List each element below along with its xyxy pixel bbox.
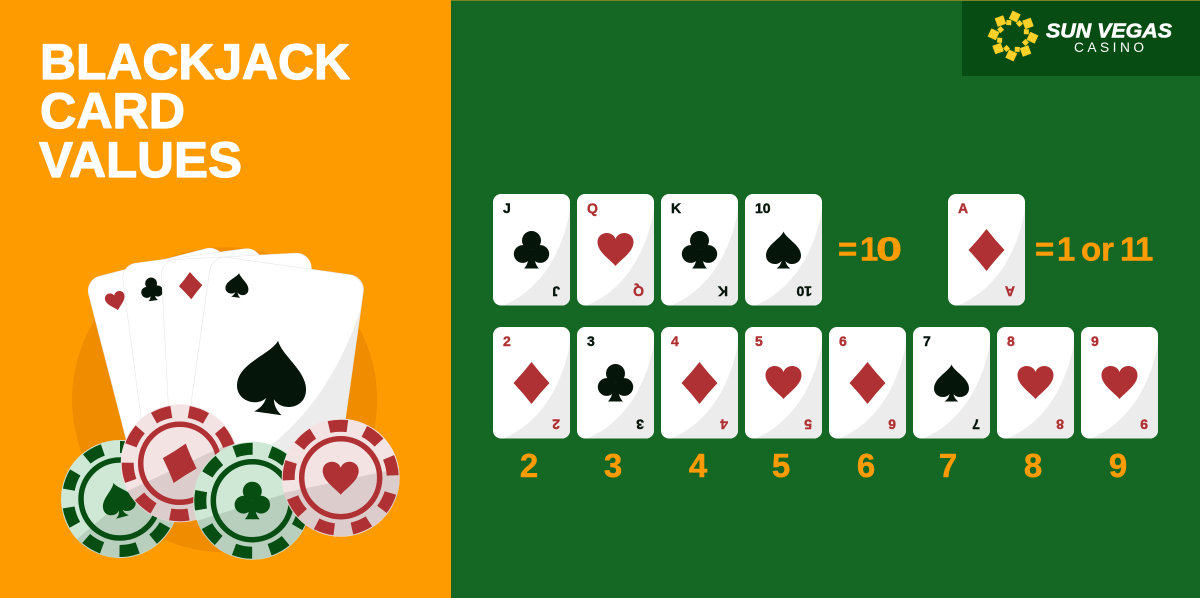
card: five of hearts: 5 <box>755 333 763 349</box>
card: eight of hearts: 8 <box>1056 416 1064 432</box>
card: ten of spades: 10 <box>796 284 812 300</box>
value label: one or eleven: = <box>1035 230 1054 268</box>
card: five of hearts <box>745 327 822 438</box>
chip: red heart <box>278 415 410 547</box>
card: three of clubs: 3 <box>636 416 644 432</box>
row: number cards <box>493 327 1158 438</box>
fanned card: ace of spades <box>181 255 365 499</box>
row: number values: 6 <box>857 447 875 484</box>
value label: equals ten <box>838 230 902 268</box>
card: seven of spades: 7 <box>923 333 931 349</box>
row: number values: 9 <box>1109 447 1127 484</box>
illustration: fanned cards and chips <box>61 245 410 582</box>
card: three of clubs <box>577 327 654 438</box>
card: ace of diamonds: A <box>958 200 968 216</box>
card: seven of spades: 7 <box>972 416 980 432</box>
card: king of clubs: K <box>718 284 728 300</box>
chip: green club <box>186 434 326 574</box>
row: number values <box>520 447 1127 484</box>
card: two of diamonds: 2 <box>552 416 560 432</box>
card: six of diamonds: 6 <box>888 416 896 432</box>
logo background <box>962 1 1200 76</box>
card: eight of hearts <box>997 327 1074 438</box>
logo wordmark <box>1046 20 1173 55</box>
card: two of diamonds <box>493 327 570 438</box>
row: number values: 2 <box>520 447 538 484</box>
card: nine of hearts: 9 <box>1091 333 1099 349</box>
chip: red diamond <box>119 403 258 541</box>
value label: equals ten: = <box>838 230 857 268</box>
logo: Sun Vegas Casino <box>962 1 1200 76</box>
chip: green spade <box>61 440 203 582</box>
value label: equals ten: 0 <box>876 230 902 268</box>
card: seven of spades <box>913 327 990 438</box>
title: BLACKJACK <box>40 34 350 90</box>
card: two of diamonds: 2 <box>503 333 511 349</box>
row: number values: 7 <box>939 447 957 484</box>
fanned card: heart <box>85 245 277 497</box>
card: jack of clubs <box>493 194 570 306</box>
value label: one or eleven: 1 <box>1057 230 1075 268</box>
card: ace of diamonds <box>948 194 1025 306</box>
card: four of diamonds: 4 <box>720 416 728 432</box>
card: five of hearts: 5 <box>804 416 812 432</box>
row: number values: 4 <box>689 447 708 484</box>
row: face cards worth ten <box>493 194 902 306</box>
value label: one or eleven: 1 <box>1135 230 1153 268</box>
card: queen of hearts <box>577 194 654 306</box>
logo icon: sun chip <box>988 11 1038 61</box>
card: ten of spades: 10 <box>755 200 771 216</box>
card: ten of spades <box>745 194 822 306</box>
card: nine of hearts: 9 <box>1140 416 1148 432</box>
value label: equals ten: 1 <box>860 230 878 268</box>
card: ace of diamonds: A <box>1005 284 1015 300</box>
card: queen of hearts: Q <box>587 200 598 216</box>
row: number values: 5 <box>772 447 790 484</box>
title: VALUES <box>39 132 242 188</box>
value label: one or eleven: or <box>1081 230 1114 268</box>
card: eight of hearts: 8 <box>1007 333 1015 349</box>
logo wordmark: SUN VEGAS <box>1046 20 1173 42</box>
row: number values: 3 <box>604 447 622 484</box>
title: CARD <box>40 83 185 139</box>
group: ace <box>948 194 1153 306</box>
card: jack of clubs: J <box>552 284 560 300</box>
title <box>39 34 350 188</box>
card: king of clubs: K <box>671 200 681 216</box>
fanned card: diamond <box>161 252 322 484</box>
card: jack of clubs: J <box>503 200 511 216</box>
card: four of diamonds: 4 <box>671 333 679 349</box>
card: nine of hearts <box>1081 327 1158 438</box>
card: queen of hearts: Q <box>633 284 644 300</box>
value label: one or eleven: 1 <box>1120 230 1138 268</box>
backdrop circle <box>72 247 377 552</box>
row: number values: 8 <box>1024 447 1042 484</box>
panel: orange left background <box>0 0 451 598</box>
card: six of diamonds: 6 <box>839 333 847 349</box>
logo wordmark: CASINO <box>1074 40 1144 55</box>
card: three of clubs: 3 <box>587 333 595 349</box>
card: six of diamonds <box>829 327 906 438</box>
card: four of diamonds <box>661 327 738 438</box>
card: king of clubs <box>661 194 738 306</box>
panel: green right background <box>451 0 1200 598</box>
fanned card: club <box>121 247 289 487</box>
